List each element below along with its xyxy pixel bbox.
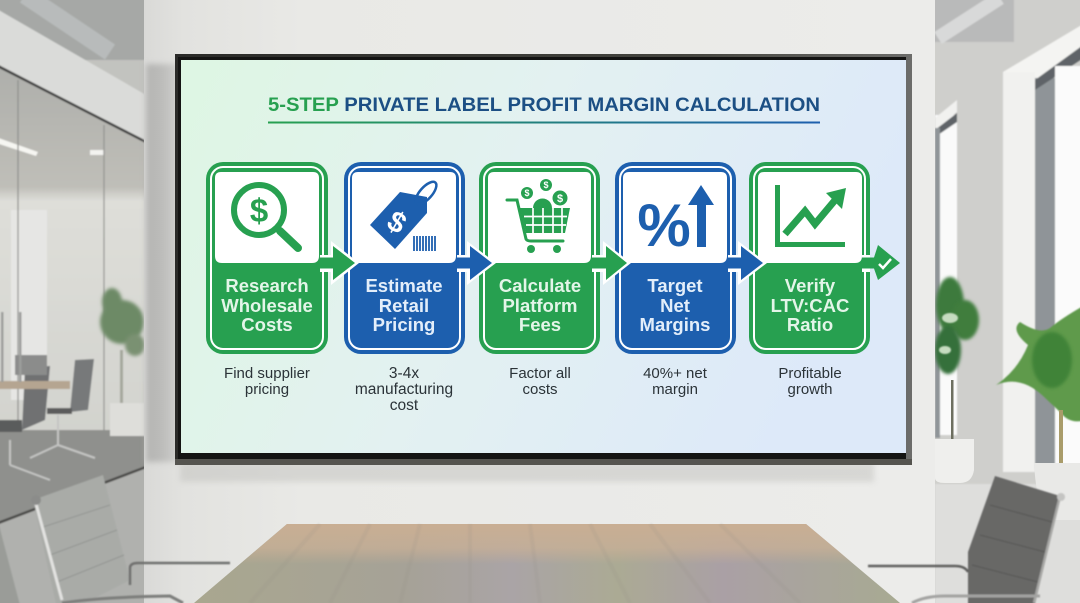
card frame	[479, 162, 600, 354]
step label: Retail	[379, 295, 429, 316]
step label: Platform	[502, 295, 578, 316]
icon: magnifier with dollar: $	[250, 192, 268, 229]
step 1 card	[206, 162, 328, 354]
office background: right windows	[934, 0, 1080, 603]
step 3 card	[479, 162, 600, 354]
step 5 card	[749, 162, 870, 354]
icon panel	[215, 172, 319, 263]
icon: price tag with barcode: $	[382, 205, 411, 241]
step label: Wholesale	[221, 295, 313, 316]
icon: percent with up arrow: %	[637, 192, 691, 259]
icon: shopping cart with coins: $	[557, 193, 563, 205]
step label: Calculate	[499, 275, 581, 296]
caption: step 4: margin	[652, 381, 698, 398]
step label: Margins	[640, 314, 710, 335]
title: 5-STEP PRIVATE LABEL PROFIT MARGIN CALCULATION	[268, 94, 820, 116]
caption: step 2: 3-4x	[389, 365, 419, 382]
caption: step 3: Factor all	[509, 365, 571, 382]
plant and pot right	[996, 305, 1080, 520]
caption: step 4: 40%+ net	[643, 365, 708, 382]
step label: Pricing	[373, 314, 435, 335]
arrow: step 4 to 5	[727, 241, 767, 285]
caption: step 1: pricing	[245, 381, 289, 398]
step label: Verify	[785, 275, 836, 296]
foreground chair left	[0, 475, 230, 603]
card frame	[615, 162, 736, 354]
icon: shopping cart with coins: $	[543, 180, 549, 190]
icon panel	[352, 172, 456, 263]
card frame	[206, 162, 328, 354]
arrow: step 3 to 4	[591, 241, 631, 285]
caption: step 3: costs	[522, 381, 558, 398]
icon: magnifier with dollar	[234, 185, 298, 248]
icon panel	[623, 172, 727, 263]
caption: step 2: manufacturing	[355, 381, 453, 398]
office background: left glass room	[0, 0, 146, 603]
background chairs	[0, 355, 95, 480]
step label: Estimate	[365, 275, 443, 296]
step label: Costs	[241, 314, 293, 335]
step 4 card	[615, 162, 736, 354]
foreground chair right	[868, 476, 1065, 603]
step label: LTV:CAC	[771, 295, 849, 316]
icon: shopping cart with coins	[507, 179, 570, 253]
caption: step 5: growth	[787, 381, 833, 398]
icon: growth chart	[775, 185, 846, 247]
conference table	[194, 524, 900, 603]
icon panel	[758, 172, 862, 263]
card frame	[344, 162, 465, 354]
caption: step 5: Profitable	[778, 365, 842, 382]
step 2 card	[344, 162, 465, 354]
display shadow	[180, 462, 874, 482]
step label: Net	[660, 295, 690, 316]
step label: Research	[225, 275, 309, 296]
display bezel	[175, 54, 912, 465]
step label: Ratio	[787, 314, 833, 335]
wall side shadow	[146, 64, 178, 462]
card frame	[749, 162, 870, 354]
icon panel	[488, 172, 591, 263]
wall behind display	[144, 0, 935, 603]
icon: price tag with barcode	[370, 179, 440, 251]
plant and pot left of windows	[935, 277, 979, 483]
background plant	[100, 288, 146, 436]
arrow: final check	[862, 245, 900, 280]
arrow: step 1 to 2	[319, 241, 359, 285]
caption: step 1: Find supplier	[224, 365, 310, 382]
icon: shopping cart with coins: $	[524, 188, 530, 198]
step label: Target	[647, 275, 703, 296]
caption: step 2: cost	[390, 397, 419, 414]
arrow: step 2 to 3	[456, 241, 496, 285]
step label: Fees	[519, 314, 561, 335]
display screen	[181, 60, 906, 453]
icon: percent with up arrow	[637, 185, 714, 259]
